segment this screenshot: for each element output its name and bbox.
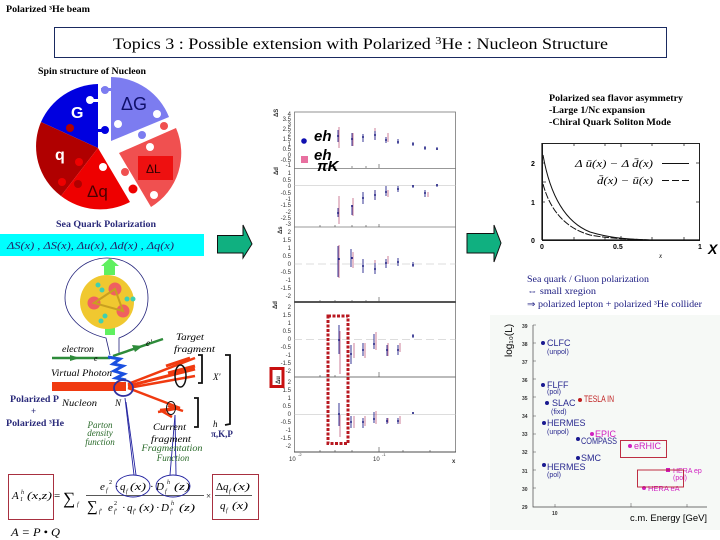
chart: luminosity vs energy: HERMES <box>547 418 586 428</box>
y ticks: 38 <box>522 342 528 348</box>
chart: luminosity vs energy: (fixd) <box>551 409 567 416</box>
chart axis labels: 1 <box>531 200 535 207</box>
y axis labels: 0 <box>288 262 292 268</box>
y axis labels: -0.5 <box>281 345 292 351</box>
y axis labels: 1 <box>288 142 292 148</box>
y axis labels: 2 <box>288 305 292 311</box>
chart: flavor asymmetry curves <box>531 143 719 260</box>
y axis labels: 1.5 <box>283 238 292 244</box>
y ticks: 29 <box>522 505 528 511</box>
y ticks: 10 <box>552 511 558 517</box>
y ticks <box>522 324 558 517</box>
target fragment rays <box>128 358 195 388</box>
text: sea flavor asymmetry <box>549 93 684 127</box>
y axis labels: -0.5 <box>281 270 292 276</box>
label: hadrons: π,K,P <box>211 429 233 439</box>
text: sea quark gluon polarization: ⇒ polarized lepton + polarized ³He collider <box>527 299 702 309</box>
formula: f' <box>133 508 137 515</box>
y axis labels: 1.5 <box>283 313 292 319</box>
label: polarized targets: Polarized P <box>10 394 60 404</box>
formula: (x) <box>139 502 154 514</box>
y axis labels: 0.5 <box>283 254 292 260</box>
labels: e' <box>146 338 153 348</box>
formula: ∑ <box>63 489 75 508</box>
slice: delta q <box>58 148 130 209</box>
arrow: left to middle <box>218 225 252 258</box>
labels: Target <box>176 332 205 342</box>
y ticks: 39 <box>522 324 528 330</box>
axis titles: Δd <box>273 301 279 309</box>
formula: ∑ <box>87 499 98 515</box>
formula: h <box>21 490 24 496</box>
arrow: middle to right <box>467 225 501 262</box>
chart: luminosity vs energy: CLFC <box>547 338 571 348</box>
data: pink series <box>339 127 428 437</box>
formula boxes <box>8 474 258 520</box>
chart axis labels: 0 <box>540 244 544 251</box>
axis titles: Δs <box>278 226 284 234</box>
formula ellipses <box>116 475 190 497</box>
y axis labels: 4 <box>288 112 292 118</box>
axis titles <box>273 109 284 384</box>
y axis labels: 1 <box>288 171 292 177</box>
y ticks: 37 <box>522 360 528 366</box>
labels: electron <box>62 344 95 354</box>
label: polarized targets: Polarized ³He <box>6 418 64 428</box>
labels: fragment <box>151 434 192 444</box>
title box: He : Nucleon Structure <box>441 36 608 53</box>
labels: fragment <box>174 344 216 354</box>
heading: sea quark polarization: Sea Quark Polarization <box>56 219 156 229</box>
x axis labels: 10 <box>289 457 296 463</box>
y axis labels: -2 <box>286 210 292 216</box>
text: sea quark gluon polarization: ⇔ small xregion <box>527 286 597 296</box>
chart: luminosity vs energy: c.m. Energy [GeV] <box>630 513 707 524</box>
y axis labels: 0 <box>288 153 292 159</box>
chart: luminosity vs energy: COMPASS <box>581 436 617 446</box>
chart: luminosity vs energy: eRHIC <box>634 441 662 451</box>
legend: eh and pi K <box>301 128 340 175</box>
formula: h <box>167 480 170 486</box>
labels: h <box>213 419 218 429</box>
y axis labels: 0 <box>288 184 292 190</box>
y axis labels: 3 <box>288 122 292 128</box>
puzzle tab <box>128 184 138 194</box>
y ticks: 30 <box>522 487 528 493</box>
slice: delta L <box>119 122 181 207</box>
y axis labels: 0 <box>288 412 292 418</box>
labels: X' <box>212 372 221 382</box>
formula: × <box>206 491 211 501</box>
y axis labels <box>281 112 292 450</box>
formula: f <box>126 488 129 495</box>
chart: luminosity vs energy: SMC <box>581 453 602 463</box>
formula: A <box>11 490 19 502</box>
text: sea flavor asymmetry: Polarized sea flavor asymmetry <box>549 93 684 103</box>
chart axis labels <box>531 161 702 251</box>
labels <box>51 332 221 444</box>
y axis labels: -0.5 <box>281 420 292 426</box>
formula: q <box>127 502 133 514</box>
label: polarized targets <box>6 394 64 428</box>
chart: luminosity vs energy: EPIC <box>595 429 617 439</box>
formula: f' <box>114 508 118 515</box>
brackets <box>194 355 230 427</box>
zero lines <box>294 186 456 414</box>
y ticks: 36 <box>522 378 528 384</box>
chart axis labels: 1 <box>698 244 702 251</box>
y axis labels: -1.5 <box>281 286 292 292</box>
highlight boxes <box>620 440 684 487</box>
y axis labels: -1.5 <box>281 203 292 209</box>
chart: flavor asymmetry curves: X <box>707 241 719 257</box>
formula: q <box>220 500 226 512</box>
label: fragmentation function: Fragmentation <box>140 443 203 453</box>
parton circle <box>114 380 133 396</box>
y axis labels: -1 <box>286 278 292 284</box>
blue points <box>541 341 580 467</box>
title box <box>54 28 666 58</box>
y axis labels: 2 <box>288 132 292 138</box>
curve: dashed <box>543 184 650 240</box>
title box: 3 <box>435 35 442 47</box>
y axis labels: -1 <box>286 428 292 434</box>
label: parton density: density <box>87 428 113 438</box>
slice: delta G <box>101 77 169 141</box>
formula: 2 <box>109 480 112 486</box>
legend: eh and pi K: eh <box>314 128 332 145</box>
formula: f <box>226 507 229 514</box>
chart: luminosity vs energy: (unpol) <box>547 349 569 356</box>
legend: eh and pi K: πK <box>317 158 340 175</box>
nucleon beam <box>52 382 126 391</box>
slice: G: G <box>71 105 83 122</box>
chart axis labels: 2 <box>531 161 535 168</box>
chart: luminosity vs energy: (pol) <box>673 475 687 482</box>
plot frames <box>294 112 456 452</box>
highlight: small square <box>271 368 283 386</box>
text: sea quark gluon polarization: Sea quark / Gluon polarization <box>527 274 650 284</box>
chart: luminosity vs energy <box>490 315 720 530</box>
y ticks: 35 <box>522 396 528 402</box>
axis titles: Δd <box>274 167 280 175</box>
formula: (x) <box>130 481 146 493</box>
legend dashed: d̄(x) − ū(x) <box>597 175 654 187</box>
formula: e <box>108 502 113 514</box>
y axis labels: -0.5 <box>281 158 292 164</box>
formula: (x) <box>233 481 250 493</box>
chart: luminosity vs energy: log₁₀(L) <box>504 324 515 357</box>
y ticks: 34 <box>522 414 528 420</box>
heading: polarized beam: Polarized ³He beam <box>6 4 91 14</box>
text: sea flavor asymmetry: -Chiral Quark Soliton Mode <box>549 117 671 127</box>
axis titles: ΔS <box>274 109 280 117</box>
slice: q <box>36 122 98 196</box>
asymmetry plots <box>273 109 456 465</box>
slice: delta G: ΔG <box>121 94 147 114</box>
chart: luminosity vs energy: SLAC <box>552 398 576 408</box>
formula: (x) <box>232 500 248 512</box>
x axis labels <box>289 452 456 465</box>
formula: h <box>171 501 174 507</box>
y axis labels: 1 <box>288 321 292 327</box>
slice: delta L: ΔL <box>146 162 161 176</box>
y axis labels: -2 <box>286 369 292 375</box>
title box: Topics 3 : Possible extension with Polarized <box>113 36 395 53</box>
formula: · <box>122 502 126 514</box>
axis titles: Δu <box>276 376 282 384</box>
chart axis labels: 0 <box>531 238 535 245</box>
chart: luminosity vs energy: FLFF <box>547 380 569 390</box>
formula: (z) <box>179 502 195 514</box>
cyan bar <box>0 234 204 256</box>
slice: delta q: Δq <box>87 182 108 201</box>
chart: luminosity vs energy: (unpol) <box>547 429 569 436</box>
formula: D <box>155 481 164 493</box>
chart axis labels: 0.5 <box>613 244 623 251</box>
target ellipse <box>175 365 186 387</box>
legend solid: Δ ū(x) − Δ d̄(x) <box>574 158 654 170</box>
formula: · <box>156 502 160 514</box>
legend: eh and pi K: eh <box>314 147 332 164</box>
x axis labels: 10 <box>373 457 380 463</box>
y axis labels: -1 <box>286 197 292 203</box>
y axis labels: 0.5 <box>283 329 292 335</box>
label: parton density: function <box>85 437 115 447</box>
virtual photon <box>108 357 126 380</box>
slice: G <box>41 84 109 148</box>
y ticks: 31 <box>522 469 528 475</box>
connector lines <box>125 398 176 475</box>
legend solid <box>574 158 689 170</box>
x ticks <box>320 164 430 452</box>
x axis labels: -1 <box>382 452 386 457</box>
chart: flavor asymmetry curves: x <box>658 252 663 260</box>
text: sea flavor asymmetry: -Large 1/Nc expansion <box>549 105 645 115</box>
TESLA point: TESLA IN <box>584 394 614 404</box>
y axis labels: 0.5 <box>283 404 292 410</box>
y axis labels: 2 <box>288 230 292 236</box>
y axis labels: 1.5 <box>283 388 292 394</box>
y axis labels: -1.5 <box>281 436 292 442</box>
y axis labels: -1 <box>286 163 292 169</box>
y axis labels: 1.5 <box>283 137 292 143</box>
label: fragmentation function: Function <box>156 453 190 463</box>
formula: f' <box>170 508 174 515</box>
scattered electron <box>113 339 163 356</box>
y axis labels: 0.5 <box>283 147 292 153</box>
cyan bar: ΔS(x) , ΔS(x), Δu(x), Δd(x) , Δq(x) <box>6 240 174 252</box>
labels: N <box>114 398 122 408</box>
formula: Δ <box>216 481 223 493</box>
labels: Virtual Photon <box>51 368 113 378</box>
formula: 2 <box>114 501 117 507</box>
formula: f <box>106 487 109 494</box>
y axis labels: 2.5 <box>283 127 292 133</box>
y axis labels: -1 <box>286 353 292 359</box>
formula: f' <box>99 508 103 515</box>
y axis labels: 3.5 <box>283 117 292 123</box>
electron beam <box>52 355 110 361</box>
formula: D <box>160 502 169 514</box>
y axis labels: 0.5 <box>283 178 292 184</box>
y axis labels: 1 <box>288 396 292 402</box>
formula: e <box>100 481 105 493</box>
y axis labels: 0 <box>288 337 292 343</box>
formula: (x,z) <box>27 490 52 502</box>
chart: luminosity vs energy: HERA ep <box>673 468 702 475</box>
formula <box>8 474 258 520</box>
y axis labels: -2 <box>286 444 292 450</box>
current fragment rays <box>128 388 183 417</box>
label: parton density <box>85 420 115 447</box>
x axis labels: x <box>452 459 456 465</box>
y axis labels: -2.5 <box>281 216 292 222</box>
highlight: dashed rectangle <box>328 316 348 444</box>
labels: Nucleon <box>61 398 98 408</box>
data: blue series <box>338 130 437 428</box>
text: sea quark gluon polarization <box>527 274 702 309</box>
chart: luminosity vs energy: HERMES <box>547 462 586 472</box>
heading: spin structure: Spin structure of Nucleon <box>38 66 146 76</box>
nucleon bubble <box>65 258 148 355</box>
formula: · <box>150 481 154 493</box>
y ticks: 32 <box>522 450 528 456</box>
label: fragmentation function <box>140 443 203 463</box>
current ellipse <box>166 402 176 414</box>
legend dashed <box>597 175 689 187</box>
label: polarized targets: + <box>31 406 36 416</box>
y axis labels: 1 <box>288 246 292 252</box>
formula: 1 <box>20 497 23 503</box>
label: parton density: Parton <box>86 420 113 430</box>
y axis labels: -3 <box>286 222 292 228</box>
labels: Current <box>153 422 187 432</box>
y axis labels: -1.5 <box>281 361 292 367</box>
equation A = P Q: A = P • Q <box>10 525 60 539</box>
formula: f <box>165 488 168 495</box>
diagram: deep inelastic scattering <box>6 258 233 475</box>
formula: f <box>229 488 232 495</box>
x axis labels: -2 <box>298 452 302 457</box>
TESLA point <box>578 394 614 404</box>
formula: q <box>120 481 126 493</box>
formula: = <box>54 490 60 502</box>
formula: f <box>77 501 80 508</box>
y axis labels: 2 <box>288 380 292 386</box>
y ticks: 33 <box>522 432 528 438</box>
y axis labels: -2 <box>286 294 292 300</box>
magenta points <box>590 432 670 490</box>
slice: q: q <box>55 147 65 164</box>
formula: · <box>115 481 119 493</box>
labels: e <box>94 354 98 363</box>
formula: (z) <box>174 481 190 493</box>
chart: luminosity vs energy: HERA eA <box>648 484 680 493</box>
curve: solid <box>543 155 650 240</box>
chart: luminosity vs energy: (pol) <box>547 389 561 396</box>
pie: nucleon spin puzzle <box>36 77 181 209</box>
formula: q <box>223 481 229 493</box>
y axis labels: -0.5 <box>281 191 292 197</box>
chart: luminosity vs energy: (pol) <box>547 472 561 479</box>
data markers <box>337 134 438 423</box>
